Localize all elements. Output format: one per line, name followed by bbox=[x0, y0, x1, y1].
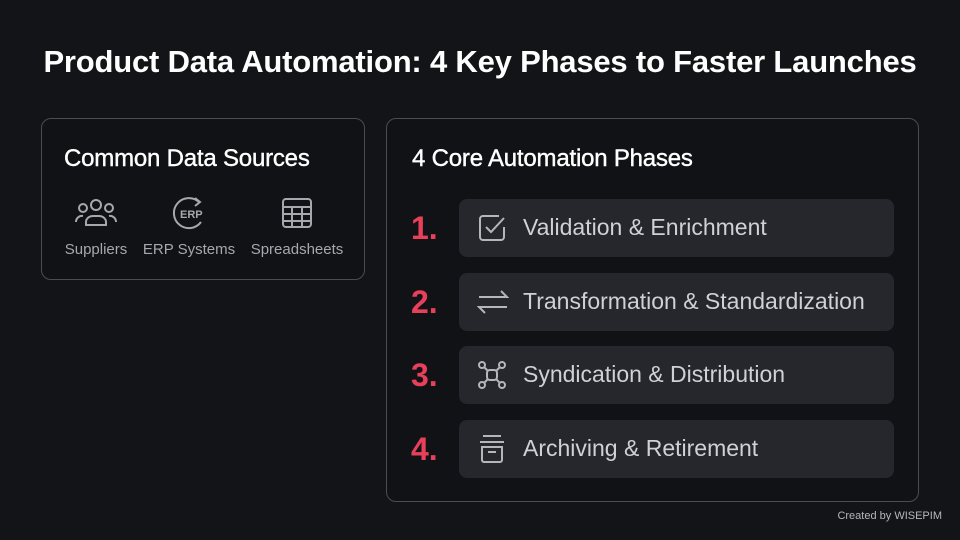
source: suppliers: Suppliers bbox=[65, 241, 127, 258]
title: Product Data Automation: 4 Key Phases to Faster Launches bbox=[43, 44, 917, 79]
source: suppliers bbox=[65, 199, 127, 258]
panel: phases: 1. bbox=[411, 210, 438, 246]
panel: phases bbox=[386, 118, 919, 502]
phase 3 bbox=[411, 346, 894, 404]
panel: phases: Archiving & Retirement bbox=[523, 435, 758, 461]
source: ERP: ERP bbox=[180, 209, 203, 221]
panel: phases: Transformation & Standardization bbox=[523, 288, 865, 314]
source: spreadsheets bbox=[251, 198, 343, 258]
phase 1 bbox=[411, 199, 894, 257]
source: ERP: ERP Systems bbox=[143, 241, 235, 258]
panel: phases: Validation & Enrichment bbox=[523, 214, 767, 240]
credit: Created by WISEPIM bbox=[837, 510, 942, 522]
panel: phases: Syndication & Distribution bbox=[523, 361, 785, 387]
phase 4 bbox=[411, 420, 894, 478]
source: ERP bbox=[143, 197, 235, 258]
source: spreadsheets: Spreadsheets bbox=[251, 241, 343, 258]
heading: sources: Common Data Sources bbox=[64, 145, 310, 172]
panel: phases: 3. bbox=[411, 357, 438, 393]
panel: phases: 4. bbox=[411, 431, 438, 467]
panel: data sources bbox=[41, 118, 365, 280]
phase 2 bbox=[411, 273, 894, 331]
panel: phases: 2. bbox=[411, 284, 438, 320]
heading: phases: 4 Core Automation Phases bbox=[412, 145, 693, 172]
